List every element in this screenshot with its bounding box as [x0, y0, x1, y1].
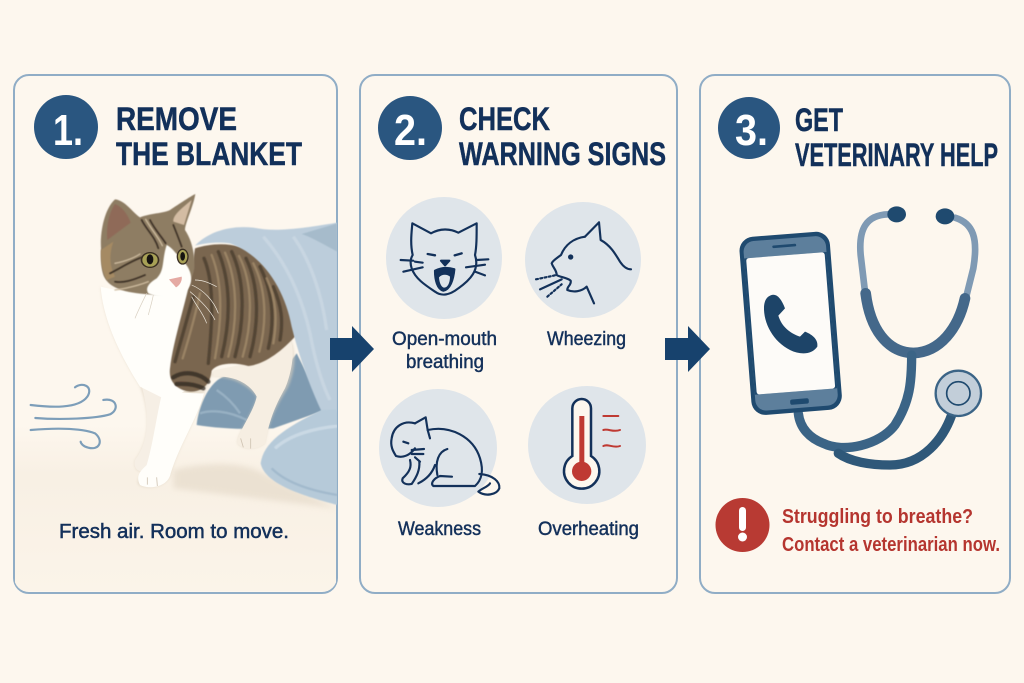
heading: check warning signs [459, 101, 666, 172]
heading: remove the blanket: REMOVE [116, 101, 237, 137]
alert [716, 498, 1000, 556]
heading: check warning signs: CHECK [459, 101, 550, 137]
sign: overheating [528, 386, 646, 540]
blanket main [195, 223, 337, 412]
label: Open-mouth [392, 329, 497, 350]
panel: step 3 get veterinary help [700, 75, 1010, 593]
heading: check warning signs: WARNING SIGNS [459, 136, 666, 172]
step number 2: 2. [394, 106, 427, 155]
blanket dark back [197, 353, 325, 429]
label: Overheating [538, 519, 639, 540]
icon: cat face with open mouth [401, 223, 488, 295]
chest [100, 287, 188, 397]
cat body tabby [170, 244, 295, 392]
sign: open-mouth breathing [386, 197, 502, 373]
legs soft edge [101, 287, 295, 488]
phone [738, 231, 843, 416]
step number 1 [34, 95, 98, 159]
label: breathing [406, 352, 484, 373]
hind leg [213, 337, 293, 449]
blanket lower fold [261, 409, 337, 505]
caption: fresh air: Fresh air. Room to move. [59, 520, 289, 543]
step number 1: 1. [53, 106, 83, 155]
icon: crouched cat [391, 417, 499, 495]
heading: get veterinary help [795, 102, 998, 173]
sign: weakness [379, 389, 499, 540]
arrow: step 2 to 3 [665, 326, 710, 372]
head [101, 194, 195, 295]
label [392, 329, 497, 373]
label: Wheezing [547, 329, 626, 350]
stethoscope [798, 214, 975, 465]
arrow: step 1 to 2 [330, 326, 374, 372]
muzzle [147, 245, 191, 297]
wind lines [31, 385, 116, 448]
floor shadow [173, 464, 337, 508]
icon: handset [764, 295, 817, 353]
sign: wheezing [525, 202, 641, 350]
illustration: phone and stethoscope [738, 206, 981, 465]
icon: cat profile breathing out [536, 222, 631, 303]
step number 2 [378, 96, 442, 160]
nose [169, 277, 182, 287]
icon: thermometer [564, 399, 620, 489]
step number 3 [718, 97, 780, 159]
back front leg [134, 388, 161, 471]
heading: remove the blanket: THE BLANKET [116, 136, 302, 172]
panel: step 2 check warning signs [360, 75, 677, 593]
heading: get veterinary help: GET [795, 102, 843, 138]
eyes [141, 252, 159, 268]
alert: Struggling to breathe? [782, 505, 973, 528]
illustration: cat leaving blanket [15, 194, 337, 591]
ears [107, 204, 131, 240]
label: Weakness [398, 519, 481, 540]
front leg [138, 388, 204, 487]
head stripes [110, 220, 182, 282]
step number 3: 3. [735, 106, 768, 155]
panel: step 1 remove the blanket [14, 75, 337, 593]
whiskers [190, 280, 218, 323]
heading: remove the blanket [116, 101, 302, 172]
